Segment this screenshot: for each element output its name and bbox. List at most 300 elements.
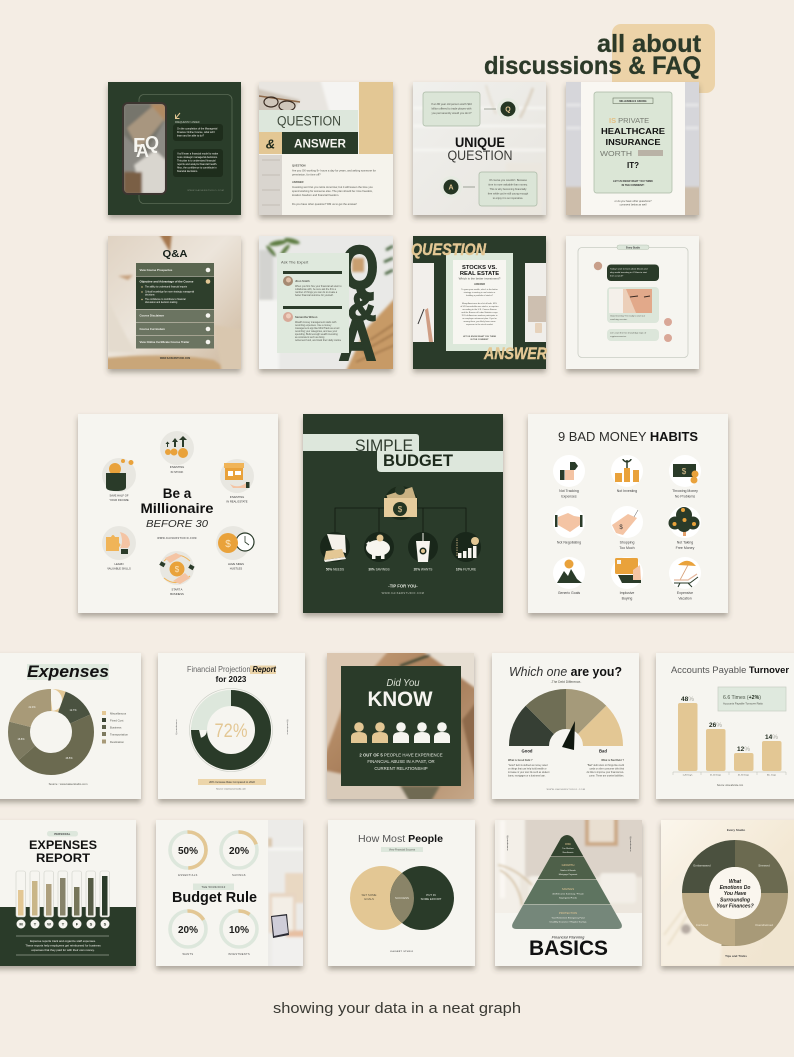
- ring: savings: SAVINGS: [232, 874, 246, 877]
- icon: learn valuable skills: [102, 526, 136, 570]
- heading: all about discussions & FAQ: discussions & FAQ: [484, 52, 701, 80]
- debt explanations: What is Bad Debt ?: [601, 759, 624, 762]
- speech bubbles: You'll learn a financial model to make: [177, 152, 219, 156]
- mint card: INSURANCE: [606, 138, 661, 147]
- footer tip: WWW.KAISERSTUDIO.COM: [382, 592, 424, 595]
- chat bubble one: from scratch?: [610, 274, 624, 278]
- ring: investments: INVESTMENTS: [228, 953, 250, 956]
- accordion list: Course Curriculum: [140, 327, 165, 331]
- icon: impulsive buying: Implusive: [620, 591, 634, 595]
- title: Accounts Payable Turnover: [671, 665, 789, 676]
- statement: CURRENT RELATIONSHIP: [374, 766, 428, 771]
- debt explanations: increase in your own life such as student: [508, 771, 550, 774]
- heading: budget rule: Budget Rule: [172, 889, 257, 906]
- icon: needs: [320, 532, 350, 572]
- pyramid: Tax Shelters: [562, 847, 574, 850]
- panel: expenses report: [0, 820, 136, 966]
- panel: financial projection report: [158, 653, 305, 799]
- ring: investments: 10%: [229, 925, 249, 936]
- center question: Surrounding: [720, 898, 750, 904]
- icon: needs: 50% NEEDS: [326, 568, 344, 572]
- source: Source: www.abcsite.com: [717, 784, 743, 787]
- title: Q&A: [162, 248, 188, 260]
- question and answer text: permission, for time off?: [292, 172, 321, 176]
- pyramid: New Assets: [563, 851, 573, 854]
- caption: or do you have other questions?: [614, 199, 652, 203]
- title: WWW.KAISERSTUDIO.COM: [157, 537, 197, 540]
- center question: What: [729, 879, 741, 885]
- panel: expenses donut: [0, 653, 141, 799]
- chat bubble with photo: Good morning! I'm ready to start our: [610, 314, 645, 318]
- center question: Your Finances?: [716, 904, 754, 910]
- heading: all about discussions & FAQ: all about: [597, 30, 702, 58]
- accordion list: The ability to understand financial reports: [145, 286, 188, 288]
- bar chart: 48%: [681, 696, 694, 703]
- panel: be a millionaire before 30: [78, 414, 278, 613]
- venn diagram: PUT IN: [426, 893, 436, 897]
- statement: FINANCIAL ABUSE IN A PAST, OR: [367, 759, 435, 764]
- FAQ letters: A: [136, 141, 149, 161]
- title: EXPENSES: [29, 838, 97, 852]
- icon: throwing money: $: [682, 467, 687, 476]
- question and answer text: Are you OK working 9+ hours a day for years, and asking someone for: [292, 168, 376, 172]
- left photo: [413, 263, 434, 342]
- heading: all about discussions & FAQ: [484, 30, 702, 80]
- icon: investing in stock: [160, 431, 194, 474]
- photo: desk and laptop: [268, 820, 303, 966]
- icon: save half of income: SAVE HALF OF: [109, 494, 129, 498]
- header bands: [303, 434, 503, 472]
- title: QUESTION: [448, 148, 512, 163]
- turnover callout: 6.6 Times (+2%): [723, 695, 761, 701]
- donut chart: [17, 698, 83, 764]
- mint frame: [446, 253, 513, 351]
- panel: Q&A accordion post: [104, 232, 245, 373]
- panel: accounts payable turnover: [656, 653, 794, 799]
- donut chart: Stressed: [758, 864, 770, 868]
- vertical captions: @yoursitename: [506, 835, 509, 851]
- panel: private healthcare post: [560, 82, 706, 219]
- pyramid: 401K/Income Summary / Private: [552, 892, 585, 896]
- icon: shopping too much: Shopping: [620, 540, 634, 544]
- icon: generic goals: Generic Goals: [558, 591, 580, 595]
- weekday labels: F: [76, 922, 79, 926]
- debt explanations: come. These are unwise liabilities.: [589, 774, 624, 778]
- side labels: @yoursitename: [286, 719, 289, 735]
- caption: showing your data in a neat graph: showing your data in a neat graph: [273, 1001, 521, 1017]
- mint card: IT?: [627, 161, 639, 170]
- icon: save half of income: [102, 458, 136, 502]
- vertical captions: @yoursitename: [629, 836, 632, 852]
- icon: learn valuable skills: VALUABLE SKILLS: [107, 566, 131, 570]
- turnover callout: [718, 687, 786, 711]
- ring: wants: 20%: [178, 925, 198, 936]
- url: WWW.KAISERSTUDIO.COM: [160, 357, 190, 360]
- expert panel: Jhon Smith: [295, 279, 310, 283]
- title: Expenses: [27, 662, 109, 681]
- article card: exposure to the stock market: [466, 323, 493, 326]
- question bubble: you permanently would you do it?: [431, 111, 472, 115]
- bar chart: 21-40 Days: [710, 774, 722, 776]
- venn diagram: SOME EFFORT: [421, 897, 442, 901]
- title: REPORT: [36, 851, 91, 865]
- speech bubbles: reports and analyze financial health.: [177, 163, 217, 166]
- debt explanations: "Bad" debt refers to things like credit: [587, 764, 624, 767]
- bar chart: 14%: [765, 734, 778, 741]
- icon: phone with photo: [122, 102, 167, 195]
- panel: question & answer post: ANSWER: [294, 136, 346, 150]
- weekday labels: S: [104, 922, 107, 926]
- title: [29, 838, 97, 865]
- expert panel: recording your categories, and see your: [295, 330, 337, 333]
- org tree lines: [335, 508, 466, 533]
- icon: investing in stock: IN STOCK: [171, 470, 184, 474]
- icon: arrow: [176, 113, 180, 118]
- mint card: IN THE COMMENT!: [622, 184, 644, 187]
- icon: throwing money: [669, 455, 701, 498]
- source: Source : www.kaiserstudio.com: [49, 782, 88, 786]
- tag: PERSONAL: [54, 833, 71, 836]
- weekday labels: T: [34, 922, 37, 926]
- icon: side hustles: HUSTLES: [230, 566, 242, 570]
- icon: shopping too much: $: [619, 525, 623, 531]
- ring: savings: [221, 832, 257, 877]
- photo: glasses on desk: [259, 82, 328, 110]
- big letters Q&A: A: [339, 308, 376, 373]
- pyramid: Mortgage Payment: [559, 873, 578, 876]
- mint card: LET US KNOW WHAT YOU THINK: [613, 180, 653, 183]
- panel: which one are you gauge: [492, 653, 639, 799]
- header bands: BUDGET: [383, 451, 454, 470]
- icon: expensive vacation: Expensive: [677, 591, 693, 595]
- vertical captions: [506, 835, 632, 852]
- title: [140, 486, 214, 540]
- icon: money tree: Free Money: [676, 546, 695, 550]
- article card: REAL ESTATE: [460, 271, 499, 277]
- icon: savings: 30% SAVINGS: [368, 568, 390, 572]
- article card: of US households own stocks, or equities: [460, 305, 499, 308]
- title: [358, 834, 443, 852]
- expert panel: collaborate with, be sure ask the firm a: [295, 288, 337, 291]
- question and answer text: location freedom and financial freedom.: [292, 193, 339, 197]
- icon: future: 10% FUTURE: [456, 568, 476, 572]
- icon: investing in real estate: IN REAL ESTATE: [226, 500, 248, 504]
- gauge chart: Good: [522, 748, 533, 754]
- side labels: @yoursitename: [175, 719, 178, 735]
- description: These reports help employees get reimbursed for business: [25, 944, 101, 948]
- chat bubble with photo: coaching session.: [610, 319, 628, 321]
- panel: emotions donut: [661, 820, 794, 966]
- answer bubble: This is why becoming financially: [490, 187, 527, 191]
- captions: [725, 828, 747, 958]
- FAQ letters: F: [133, 135, 145, 157]
- chat bubble one: why would investing in it? How to start: [610, 271, 647, 274]
- tube bar chart: [16, 871, 110, 917]
- pyramid: PROTECTION: [559, 911, 577, 915]
- chat bubble with photo: [607, 287, 672, 326]
- article card: among them, you likely have some: [464, 320, 496, 323]
- icon: not negotiating: [553, 506, 585, 544]
- captions: Every Studio: [727, 828, 745, 832]
- caption bar: Source: www.kaiserstudio.com: [216, 788, 246, 790]
- FAQ letters: [133, 133, 159, 161]
- article card: To grow your wealth, which is the better: [461, 288, 498, 291]
- big letters Q&A: [339, 234, 378, 373]
- icon: future: [451, 532, 481, 572]
- article card: STOCKS VS.: [462, 265, 497, 271]
- icon: not investing: Not Investing: [617, 489, 637, 493]
- article card: according to the U.S. Census Bureau: [462, 308, 497, 311]
- statement: [359, 752, 443, 771]
- heading: budget rule: THE 50/30/20/10: [201, 885, 226, 889]
- title: Financial Projection Report: [187, 665, 276, 674]
- icon: side hustles: $: [225, 539, 231, 550]
- chat bubble three: Let's start the free knowledge topic of: [610, 332, 647, 334]
- question bubble: billion offered to trade places with: [432, 106, 472, 110]
- donut chart: 6%: [55, 698, 60, 701]
- debt explanations: "Good" debt is defined as money owed: [508, 764, 548, 767]
- accordion list: The confidence to contribute to financial: [145, 298, 186, 301]
- legend: Transportation: [110, 732, 128, 736]
- answer bubble: Of course you wouldn't. Because: [489, 178, 527, 182]
- icon: not investing: [611, 455, 643, 493]
- question and answer text: Do you have other question? DM us to get the answer!: [292, 202, 357, 206]
- mint card: WORTH: [600, 149, 632, 158]
- FAQ letters: Q: [145, 133, 159, 153]
- turnover callout: Accounts Payable Turnover Ratio: [723, 702, 763, 706]
- debt explanations: [508, 759, 624, 791]
- icon: money bills: $: [398, 505, 403, 514]
- heading highlight block: [612, 24, 715, 93]
- title: 9 BAD MONEY HABITS: [558, 429, 698, 444]
- icon: wants: [408, 532, 438, 572]
- ring: essentials: [170, 832, 206, 877]
- panel: did you know: [323, 649, 478, 803]
- center question: [716, 879, 754, 910]
- icon: not negotiating: Not Negotiating: [557, 540, 581, 544]
- expert panel: better financial outcome for yourself.: [295, 294, 334, 297]
- accordion list: [136, 263, 214, 348]
- speech bubbles: more strategic managerial decisions.: [177, 156, 218, 159]
- answer bubble: [479, 172, 537, 206]
- icon: not tracking expenses: [553, 455, 585, 498]
- panel: simple budget: [303, 414, 503, 613]
- title: BASICS: [529, 937, 608, 960]
- speech bubbles: FREQUENTLY ASKED: [175, 121, 200, 124]
- url: WWW.KAISERSTUDIO.COM: [187, 189, 224, 192]
- venn diagram: SET SOME: [362, 893, 377, 897]
- expert panel: Ask The Expert: [281, 260, 309, 264]
- side labels: [175, 719, 289, 735]
- pyramid: RISK: [565, 843, 571, 846]
- photo: shelves strip: [259, 155, 282, 215]
- expert panel: number of things you can do to create a: [295, 291, 338, 294]
- url: KAISERT STUDIO: [390, 950, 414, 953]
- ring: essentials: 50%: [178, 846, 198, 857]
- icon: money bills: [384, 485, 418, 520]
- gauge chart: Bad: [599, 748, 607, 754]
- icon: wants: 20% WANTS: [414, 568, 432, 572]
- question and answer text: Investing won't let you retire tomorrow, but it will lessen the time you: [292, 185, 373, 189]
- accordion list: discussion and decision making: [145, 302, 178, 304]
- bar chart: 60+ Days: [767, 774, 777, 776]
- icon: investing in stock: INVESTING: [170, 465, 184, 469]
- expert panel: management app like Mint/Track as a tool: [295, 327, 340, 330]
- center question: You Have: [724, 891, 747, 897]
- big letters Q&A: &: [348, 285, 376, 329]
- question bubble: [423, 92, 480, 126]
- icon: start a business: START A: [172, 588, 183, 592]
- donut chart 72%: [190, 688, 272, 772]
- title: Financial Planning: [552, 934, 585, 940]
- dark panel: [341, 666, 461, 786]
- title: How Most People: [358, 834, 443, 845]
- expert panel: retirement fund, and track their daily routine: [295, 339, 342, 342]
- icon: Q badge: Q: [505, 106, 511, 114]
- article card: ANSWER: [474, 283, 485, 286]
- icon: save half of income: YOUR INCOME: [109, 498, 129, 502]
- title: [187, 665, 276, 684]
- title: -The Debt Difference-: [551, 680, 581, 684]
- speech bubbles: Finance Online Course, what will I: [177, 131, 215, 134]
- icon: throwing money: No Problems: [675, 494, 695, 498]
- title: Millionaire: [140, 501, 214, 516]
- debt explanations: loans, mortgages or a business loan.: [508, 774, 546, 778]
- bar chart: 41-60 Days: [738, 774, 750, 776]
- icon: shopping too much: Too Much: [619, 546, 635, 550]
- pyramid: Stocks & Bonds: [560, 869, 577, 872]
- accordion list: decisions: [145, 294, 155, 296]
- people pictogram: [351, 722, 450, 743]
- caption bar: 20% Increase Rate Compared to 2022: [209, 780, 255, 784]
- title: [448, 135, 512, 163]
- weekday labels: M: [19, 922, 23, 926]
- header bands: SIMPLE: [355, 436, 413, 455]
- ANSWER word: ANSWER: [483, 344, 548, 363]
- question and answer text: ANSWER: [292, 180, 304, 184]
- panel: unique question post: [413, 82, 546, 215]
- speech bubbles: This plan is to understand financial: [177, 160, 216, 162]
- article card: Which is the better investment?: [459, 276, 501, 280]
- pyramid: Disability Insurance / Regular Savings: [550, 920, 587, 924]
- panel: chat post: [566, 236, 699, 369]
- room photo: [496, 820, 642, 913]
- answer bubble: free while you're still young enough: [488, 192, 529, 196]
- footer tip: -TIP FOR YOU-: [388, 584, 418, 588]
- debt explanations: cards or other consumer debt that: [590, 768, 624, 770]
- donut chart 72%: 72%: [214, 721, 248, 742]
- article card: and the Bureau of Labor Statistics says: [461, 311, 498, 314]
- expert panel: as consistent such as doing: [295, 336, 325, 339]
- captions: Tips and Tricks: [725, 954, 747, 958]
- title: [368, 678, 433, 711]
- icon: not tracking expenses: Expenses: [561, 494, 577, 498]
- article card: 70% of American workers participate in: [462, 314, 498, 317]
- panel: question & answer post: [255, 78, 393, 215]
- icon: start a business: $: [175, 565, 180, 574]
- question bubble: If an 80 year old person worth $10: [431, 102, 472, 106]
- accordion list: Objective and Advantage of the Course: [140, 280, 194, 284]
- venn diagram: GOALS: [364, 897, 374, 901]
- panel: stocks vs real estate post: [411, 236, 548, 369]
- donut chart: Confused: [696, 923, 709, 927]
- ring: savings: 20%: [229, 846, 249, 857]
- article card: building a portfolio of stocks?: [466, 294, 494, 297]
- title: View Financial Success: [389, 848, 416, 852]
- center question: Emotions Do: [720, 885, 750, 891]
- pyramid: [512, 835, 622, 929]
- pyramid: Your Retirement Emergency Fund: [552, 916, 585, 920]
- title: Did You: [386, 678, 420, 689]
- icon: impulsive buying: [611, 557, 643, 600]
- title: BEFORE 30: [146, 519, 208, 530]
- bar chart: 26%: [709, 722, 722, 729]
- icon: side hustles: [216, 526, 254, 570]
- tag: Every Studio: [626, 246, 641, 249]
- expert panel: Samantha Wilson: [295, 315, 318, 319]
- panel: question & answer post: &: [266, 136, 275, 152]
- icon: investing in real estate: [220, 459, 254, 504]
- chat bubble three: cryptocurrencies.: [610, 335, 627, 338]
- right photo: [525, 263, 546, 342]
- legend: Miscellanous: [110, 712, 127, 716]
- description: [25, 939, 101, 952]
- donut chart: 46.5%: [65, 757, 73, 760]
- article card: IN THE COMMENT: [470, 339, 489, 341]
- icon: savings: [364, 532, 394, 572]
- mint card: MILLENNIALS ASKING: [619, 100, 647, 103]
- expert panel: spending. Build enough wealth investing: [295, 333, 338, 336]
- icon: money tree: Not Taking: [677, 540, 693, 544]
- icon: expensive vacation: Vacation: [678, 596, 692, 600]
- accordion list: View Course Prospectus: [140, 268, 173, 272]
- icon: expensive vacation: [669, 557, 701, 600]
- weekday labels: S: [90, 922, 93, 926]
- pyramid: Segregated Funds: [559, 896, 578, 900]
- donut chart: 22.0%: [28, 706, 36, 709]
- panel: question & answer post: QUESTION: [277, 114, 341, 128]
- chat bubble one: [594, 262, 659, 281]
- donut chart: [693, 854, 774, 932]
- icon: investing in real estate: INVESTING: [230, 495, 244, 499]
- footer tip: [382, 584, 424, 595]
- expert panel: When you first hire your financial ad-visor to: [295, 285, 342, 288]
- title: for 2023: [216, 675, 247, 684]
- speech bubbles: financial decisions.: [177, 170, 198, 173]
- icon: start a business: BUSINESS: [170, 592, 184, 596]
- icon: generic goals: [553, 557, 585, 595]
- question and answer text: QUESTION: [292, 164, 306, 168]
- mint card: IS PRIVATE: [609, 116, 649, 125]
- weekday labels: W: [47, 922, 51, 926]
- article card: LET US KNOW WHAT YOU THINK: [463, 335, 497, 338]
- caption: comment below as well: [620, 202, 647, 206]
- article card: an employer retirement plan. If you're: [462, 317, 498, 320]
- speech bubbles: On the completion of the Managerial: [177, 128, 218, 130]
- accordion list: Critical knowledge for more strategic managerial: [145, 290, 195, 294]
- gauge chart: [514, 694, 618, 798]
- weekday labels: [16, 920, 110, 928]
- big letters Q&A: Q: [341, 234, 378, 301]
- panel: 9 bad money habits: [528, 414, 728, 613]
- question and answer text: spend working for someone else. The plan should be: time freedom,: [292, 189, 373, 193]
- QUESTION word: QUESTION: [411, 240, 487, 259]
- pyramid: SAVINGS: [562, 887, 574, 891]
- caption: [614, 199, 652, 206]
- debt explanations: on things that can help build wealth or: [508, 768, 547, 770]
- donut chart: 12.7%: [69, 709, 77, 712]
- panel: how most people venn: [328, 820, 475, 966]
